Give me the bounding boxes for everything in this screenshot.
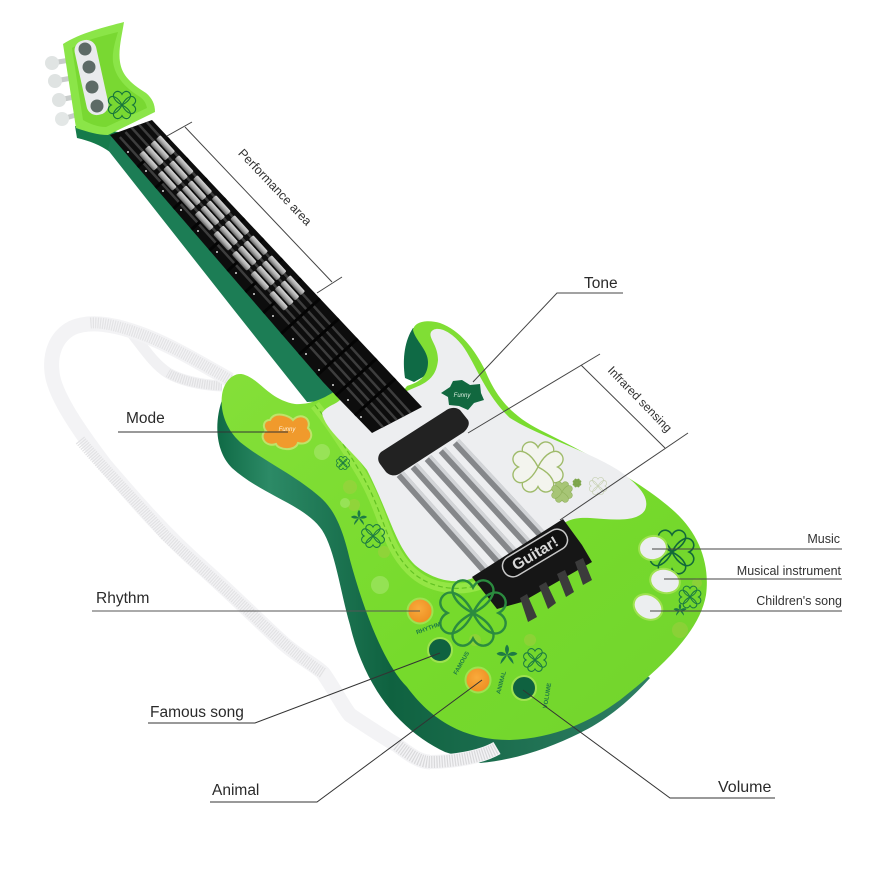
pickguard clover: [513, 442, 563, 492]
headstock: [63, 22, 155, 152]
fret dots: [127, 151, 362, 418]
decorative clovers: [336, 456, 701, 671]
callout: famous song: Famous song: [150, 704, 244, 721]
nut bar: [378, 408, 469, 475]
guitar: [45, 22, 707, 763]
callout: performance area: Performance area: [235, 146, 314, 228]
callout: animal: Animal: [212, 782, 259, 799]
button: mode: [263, 415, 311, 449]
callout: performance area: [167, 122, 342, 293]
button captions: RHYTHM: [416, 622, 442, 636]
tuner plate: [73, 38, 110, 117]
button captions: VOLUME: [543, 683, 553, 709]
callout: tone: [473, 275, 623, 382]
bridge pegs: [520, 558, 592, 622]
button: mode: Funny: [279, 427, 296, 433]
button: tone: Funny: [454, 393, 471, 399]
callout: animal: [210, 680, 482, 802]
bridge with Guitar! plate: [472, 519, 592, 622]
decorative vine border: [315, 405, 482, 588]
body side: [217, 400, 650, 763]
icon: headstock clover: [108, 91, 136, 119]
callout: infrared sensing: Infrared sensing: [605, 363, 675, 435]
upper horn side: [404, 328, 432, 382]
white buttons: music, instrument, children's song: [629, 534, 683, 625]
panel buttons: [408, 598, 536, 700]
pickguard: [322, 329, 646, 581]
callout: tone: Tone: [584, 275, 618, 292]
button captions: [416, 622, 553, 709]
callout: musical instrument: Musical instrument: [737, 564, 842, 578]
callout: volume: [523, 690, 775, 798]
callout: volume: Volume: [718, 779, 771, 796]
button: tone: [441, 380, 484, 410]
big clover: [440, 580, 506, 646]
callout: children's song: Children's song: [756, 594, 842, 608]
callout: mode: Mode: [126, 410, 165, 427]
shoulder strap: [52, 323, 430, 762]
bridge with Guitar! plate: Guitar!: [509, 533, 562, 574]
strings: [400, 440, 545, 572]
fretboard: [109, 107, 422, 443]
callout: rhythm: Rhythm: [96, 590, 149, 607]
tuning pegs: [45, 56, 76, 126]
small pickguard clovers: [552, 477, 607, 502]
callout: infrared sensing: [468, 354, 688, 520]
callout: famous song: [148, 653, 440, 723]
callout: music: Music: [807, 532, 840, 546]
fret inlay bars: [139, 135, 305, 311]
body top: [222, 321, 707, 740]
faint printed blossoms: [314, 444, 702, 646]
button captions: FAMOUS: [453, 651, 471, 676]
button captions: ANIMAL: [496, 670, 508, 695]
neck side: [108, 134, 345, 402]
strap end over body: [397, 745, 497, 762]
